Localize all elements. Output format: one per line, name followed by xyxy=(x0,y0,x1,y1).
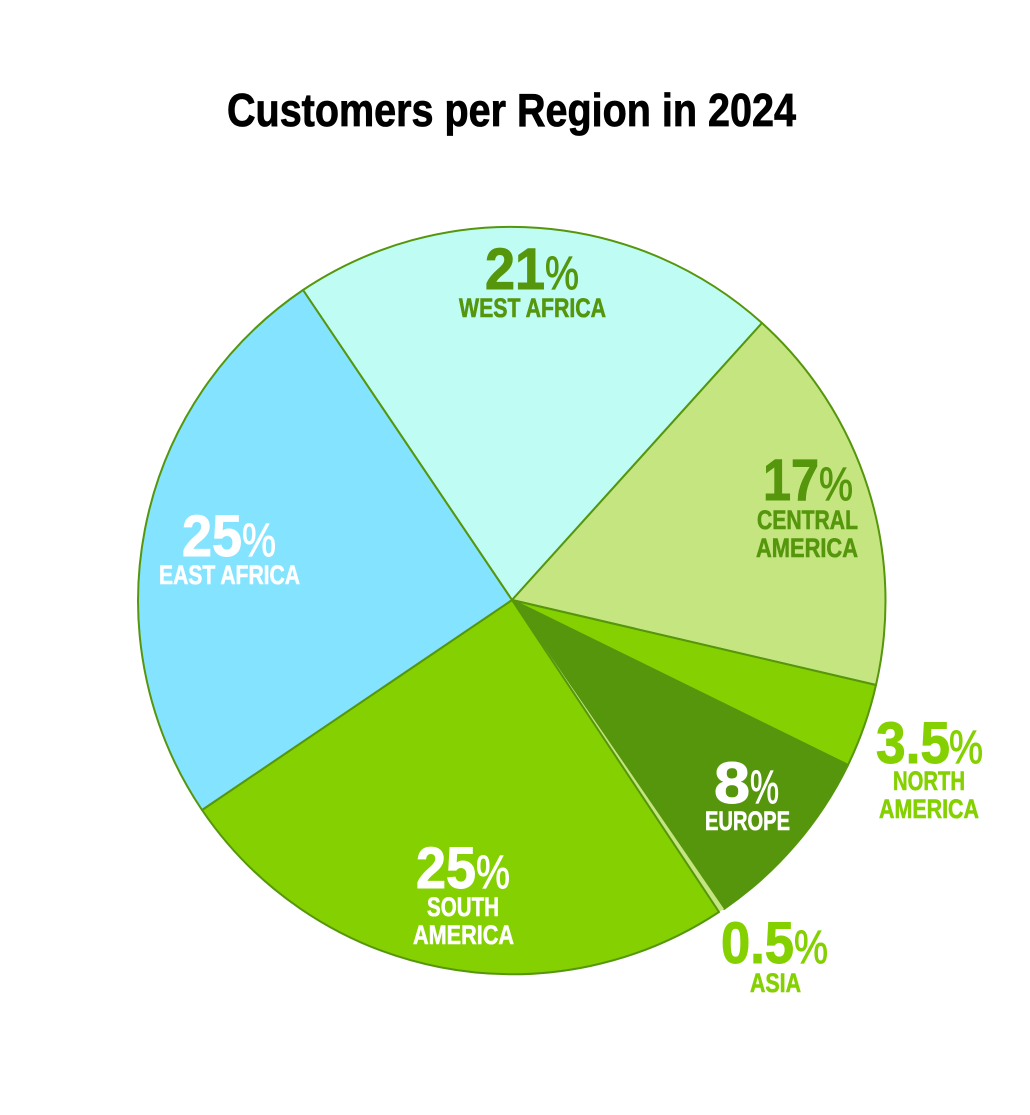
label: west africa: % xyxy=(545,246,579,299)
label: south america: AMERICA xyxy=(413,920,514,950)
label: south america: 25 xyxy=(416,836,476,901)
slice: central america xyxy=(512,323,885,685)
label: north america xyxy=(876,711,983,824)
label: europe: % xyxy=(750,760,779,813)
label: east africa xyxy=(159,504,300,590)
label: south america: % xyxy=(476,845,510,898)
slice: north america xyxy=(512,600,876,765)
label: west africa: WEST AFRICA xyxy=(459,293,606,323)
label: europe xyxy=(705,751,790,836)
label: west africa: 21 xyxy=(485,237,545,302)
slice: europe xyxy=(512,600,848,909)
slice: asia xyxy=(512,600,724,912)
label: europe: EUROPE xyxy=(705,806,790,836)
label: west africa xyxy=(459,237,606,323)
slice: south america xyxy=(202,600,719,974)
label: central america: AMERICA xyxy=(756,533,858,563)
label: asia xyxy=(721,911,828,998)
slice: west africa xyxy=(303,227,762,600)
pie chart xyxy=(138,227,885,974)
label: north america: 3.5 xyxy=(876,711,950,776)
label: east africa: EAST AFRICA xyxy=(159,560,300,590)
label: central america xyxy=(756,448,858,563)
label: south america xyxy=(413,836,514,950)
label: east africa: % xyxy=(242,513,276,566)
label: north america: NORTH xyxy=(893,766,965,796)
title: Customers per Region in 2024 xyxy=(227,84,796,136)
label: asia: ASIA xyxy=(750,968,801,998)
label: north america: AMERICA xyxy=(879,794,979,824)
slice: east africa xyxy=(138,290,512,810)
label: east africa: 25 xyxy=(182,504,242,569)
label: central america: % xyxy=(819,457,853,510)
label: europe: 8 xyxy=(714,751,750,816)
label: asia: % xyxy=(794,920,828,973)
label: central america: 17 xyxy=(763,448,819,513)
label: central america: CENTRAL xyxy=(757,505,858,535)
label: asia: 0.5 xyxy=(721,911,794,976)
label: south america: SOUTH xyxy=(427,892,499,922)
label: north america: % xyxy=(949,720,983,773)
